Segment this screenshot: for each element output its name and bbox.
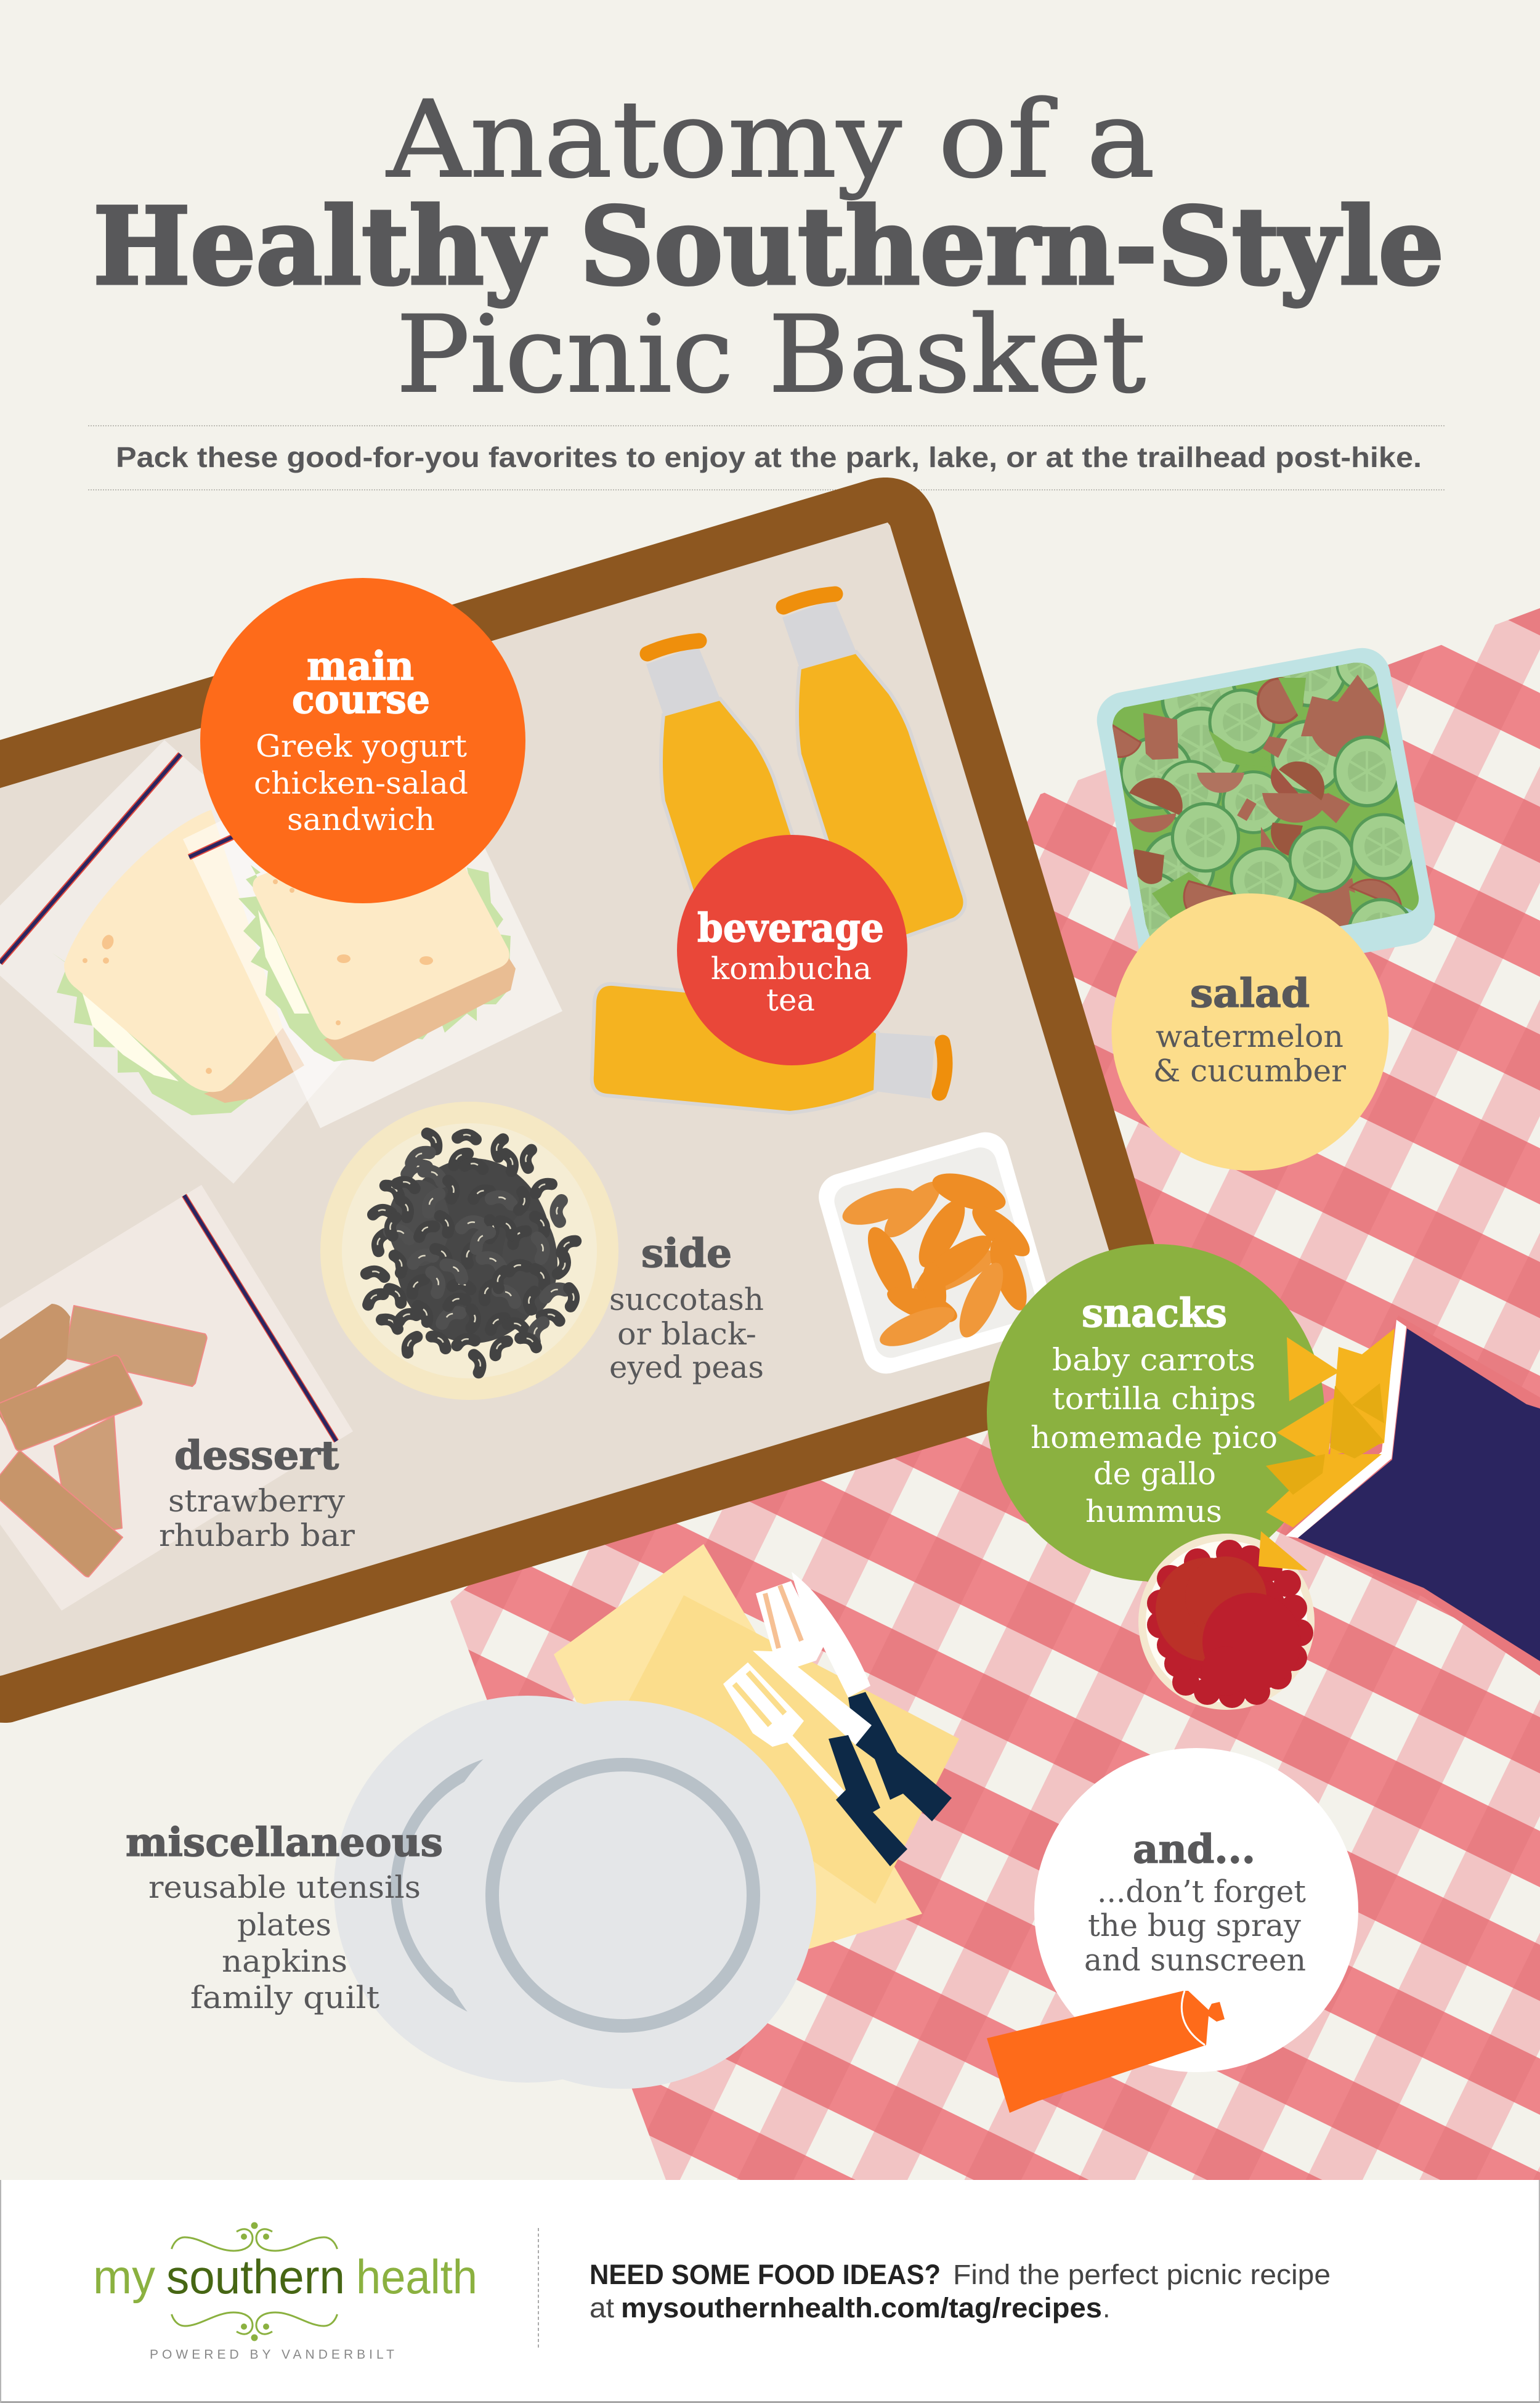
footer call to action: at bbox=[590, 2292, 615, 2324]
snacks label: hummus bbox=[1085, 1494, 1222, 1529]
navy chip bag bbox=[1286, 1320, 1540, 1661]
logo: southern bbox=[166, 2250, 345, 2304]
logo: POWERED BY VANDERBILT bbox=[150, 2348, 394, 2362]
logo: my bbox=[93, 2250, 155, 2304]
subtitle: Pack these good-for-you favorites to enjoy at the park, lake, or at the trailhead post-hike. bbox=[116, 441, 1422, 473]
main course label: main bbox=[307, 643, 414, 689]
front plate bbox=[428, 1701, 816, 2089]
back plate rim bbox=[391, 1758, 487, 2012]
title: Picnic Basket bbox=[396, 293, 1146, 417]
miscellaneous label: family quilt bbox=[190, 1980, 379, 2015]
title: Healthy Southern-Style bbox=[93, 184, 1444, 309]
and... label: the bug spray bbox=[1088, 1908, 1302, 1943]
snacks label bbox=[987, 1244, 1324, 1582]
side label: eyed peas bbox=[609, 1349, 764, 1385]
utensils bbox=[723, 1572, 952, 1866]
sandwich bag: right bbox=[183, 722, 562, 1128]
miscellaneous label: napkins bbox=[222, 1943, 347, 1979]
sandwich bag: left bbox=[0, 740, 424, 1184]
bag seal: right bbox=[189, 831, 246, 857]
bottle: upper left bbox=[646, 641, 829, 999]
footer call to action bbox=[590, 2259, 1331, 2324]
salad label: & cucumber bbox=[1153, 1053, 1346, 1089]
gingham tablecloth bbox=[450, 608, 1540, 2180]
miscellaneous label: reusable utensils bbox=[148, 1869, 421, 1905]
logo bbox=[93, 2222, 477, 2362]
side dish plate with black-eyed peas bbox=[320, 1102, 618, 1400]
napkins bbox=[554, 1544, 959, 1949]
salad label bbox=[1111, 893, 1388, 1171]
strawberry rhubarb bars bbox=[0, 1304, 207, 1577]
dessert label: strawberry bbox=[168, 1483, 346, 1519]
beverage label: beverage bbox=[697, 905, 884, 951]
dessert label bbox=[159, 1433, 355, 1553]
main course label: chicken-salad bbox=[254, 765, 468, 801]
dessert label: dessert bbox=[174, 1433, 339, 1479]
miscellaneous label: miscellaneous bbox=[126, 1820, 443, 1866]
snacks label: tortilla chips bbox=[1052, 1381, 1256, 1417]
footer call to action: mysouthernhealth.com/tag/recipes bbox=[621, 2292, 1102, 2324]
footer call to action: . bbox=[1103, 2292, 1111, 2324]
picnic tray bbox=[0, 478, 1192, 1723]
beverage label bbox=[677, 835, 907, 1065]
salad label: watermelon bbox=[1156, 1019, 1343, 1054]
sunscreen tube bbox=[987, 1991, 1225, 2113]
sandwich: right bbox=[238, 806, 516, 1062]
carrot container bbox=[813, 1127, 1058, 1379]
main course label: Greek yogurt bbox=[256, 728, 467, 764]
dessert bag seal bbox=[184, 1195, 336, 1441]
sandwich: left bbox=[52, 810, 304, 1115]
main course label bbox=[200, 578, 525, 903]
back plate bbox=[334, 1696, 721, 2083]
snacks label: de gallo bbox=[1093, 1456, 1216, 1492]
logo: health bbox=[356, 2250, 477, 2304]
snacks label: baby carrots bbox=[1052, 1342, 1255, 1378]
side label: side bbox=[641, 1230, 732, 1277]
and... label bbox=[1034, 1748, 1358, 2072]
snacks label: homemade pico bbox=[1031, 1420, 1278, 1455]
side label: or black- bbox=[617, 1316, 756, 1352]
main course label: course bbox=[292, 677, 430, 723]
title bbox=[93, 78, 1444, 417]
and... label: ...don’t forget bbox=[1097, 1874, 1306, 1909]
beverage label: tea bbox=[766, 982, 815, 1018]
miscellaneous label: plates bbox=[237, 1907, 331, 1943]
main course label: sandwich bbox=[287, 802, 435, 837]
footer bbox=[0, 2180, 1540, 2403]
salad label: salad bbox=[1190, 970, 1310, 1017]
dipping chip bbox=[1258, 1531, 1308, 1571]
and... label: and... bbox=[1133, 1826, 1255, 1872]
beverage label: kombucha bbox=[711, 951, 872, 986]
miscellaneous label bbox=[126, 1820, 443, 2015]
salsa bowl bbox=[1138, 1534, 1315, 1710]
dessert label: rhubarb bar bbox=[159, 1518, 355, 1553]
dessert bag bbox=[0, 1185, 353, 1611]
bottle: upper right bbox=[782, 594, 965, 952]
side label: succotash bbox=[609, 1282, 764, 1317]
snacks label: snacks bbox=[1082, 1290, 1227, 1336]
footer call to action: NEED SOME FOOD IDEAS? bbox=[590, 2259, 941, 2290]
and... label: and sunscreen bbox=[1084, 1942, 1306, 1978]
footer call to action: Find the perfect picnic recipe bbox=[953, 2259, 1331, 2290]
salad container bbox=[1096, 648, 1435, 953]
chip bag shadow bbox=[1286, 1315, 1540, 1676]
bag seal: left bbox=[0, 754, 180, 963]
tortilla chips bbox=[1266, 1328, 1395, 1527]
title: Anatomy of a bbox=[386, 78, 1155, 201]
side label bbox=[609, 1230, 764, 1385]
bottle: lying bbox=[592, 984, 945, 1113]
